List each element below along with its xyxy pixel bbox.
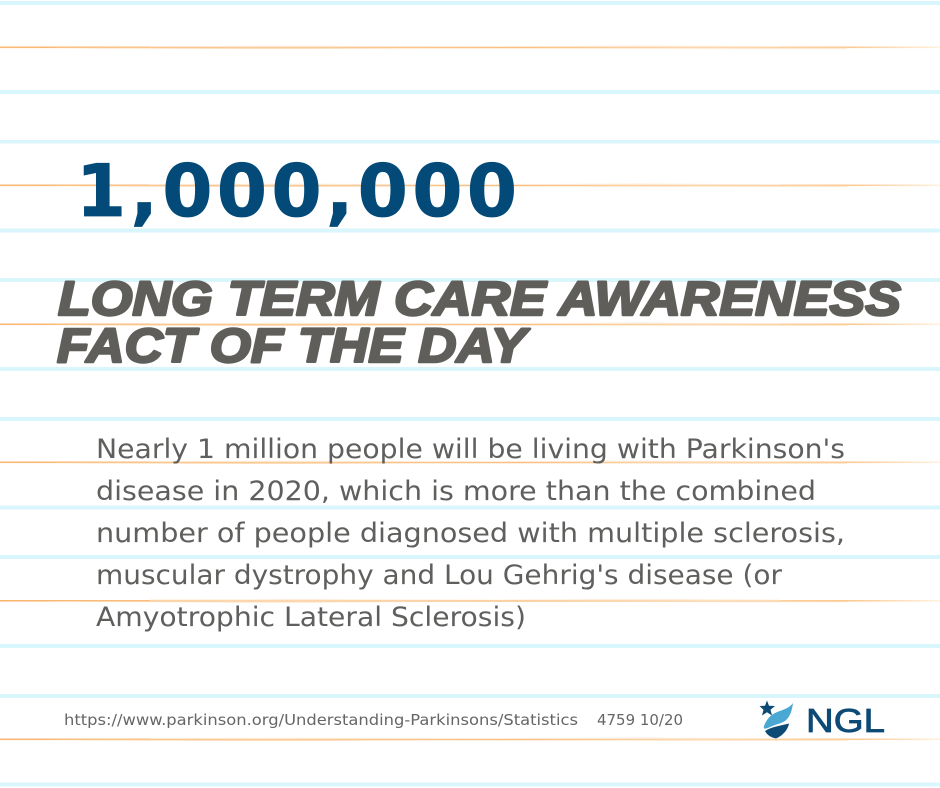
heading line 2: FACT OF THE DAY [57,320,530,373]
body paragraph [96,434,845,633]
document code: 4759 10/20 [597,711,683,729]
NGL logo [760,700,885,739]
body line 5: Amyotrophic Lateral Sclerosis) [96,602,526,633]
icon: light blue wave [764,703,793,729]
big number: 1,000,000 [76,149,517,233]
body line 1: Nearly 1 million people will be living with Parkinson's [96,434,845,465]
source url: https://www.parkinson.org/Understanding-Parkinsons/Statistics [64,711,578,729]
icon: star [760,700,775,716]
heading line 1: LONG TERM CARE AWARENESS [58,273,901,326]
source footer [64,711,683,729]
icon: dark blue shield [765,724,789,738]
body line 4: muscular dystrophy and Lou Gehrig's disease (or [96,560,782,591]
heading: long term care awareness fact of the day [57,273,901,373]
logo wordmark: NGL [806,702,885,739]
body line 2: disease in 2020, which is more than the combined [96,476,816,507]
body line 3: number of people diagnosed with multiple sclerosis, [96,518,845,549]
